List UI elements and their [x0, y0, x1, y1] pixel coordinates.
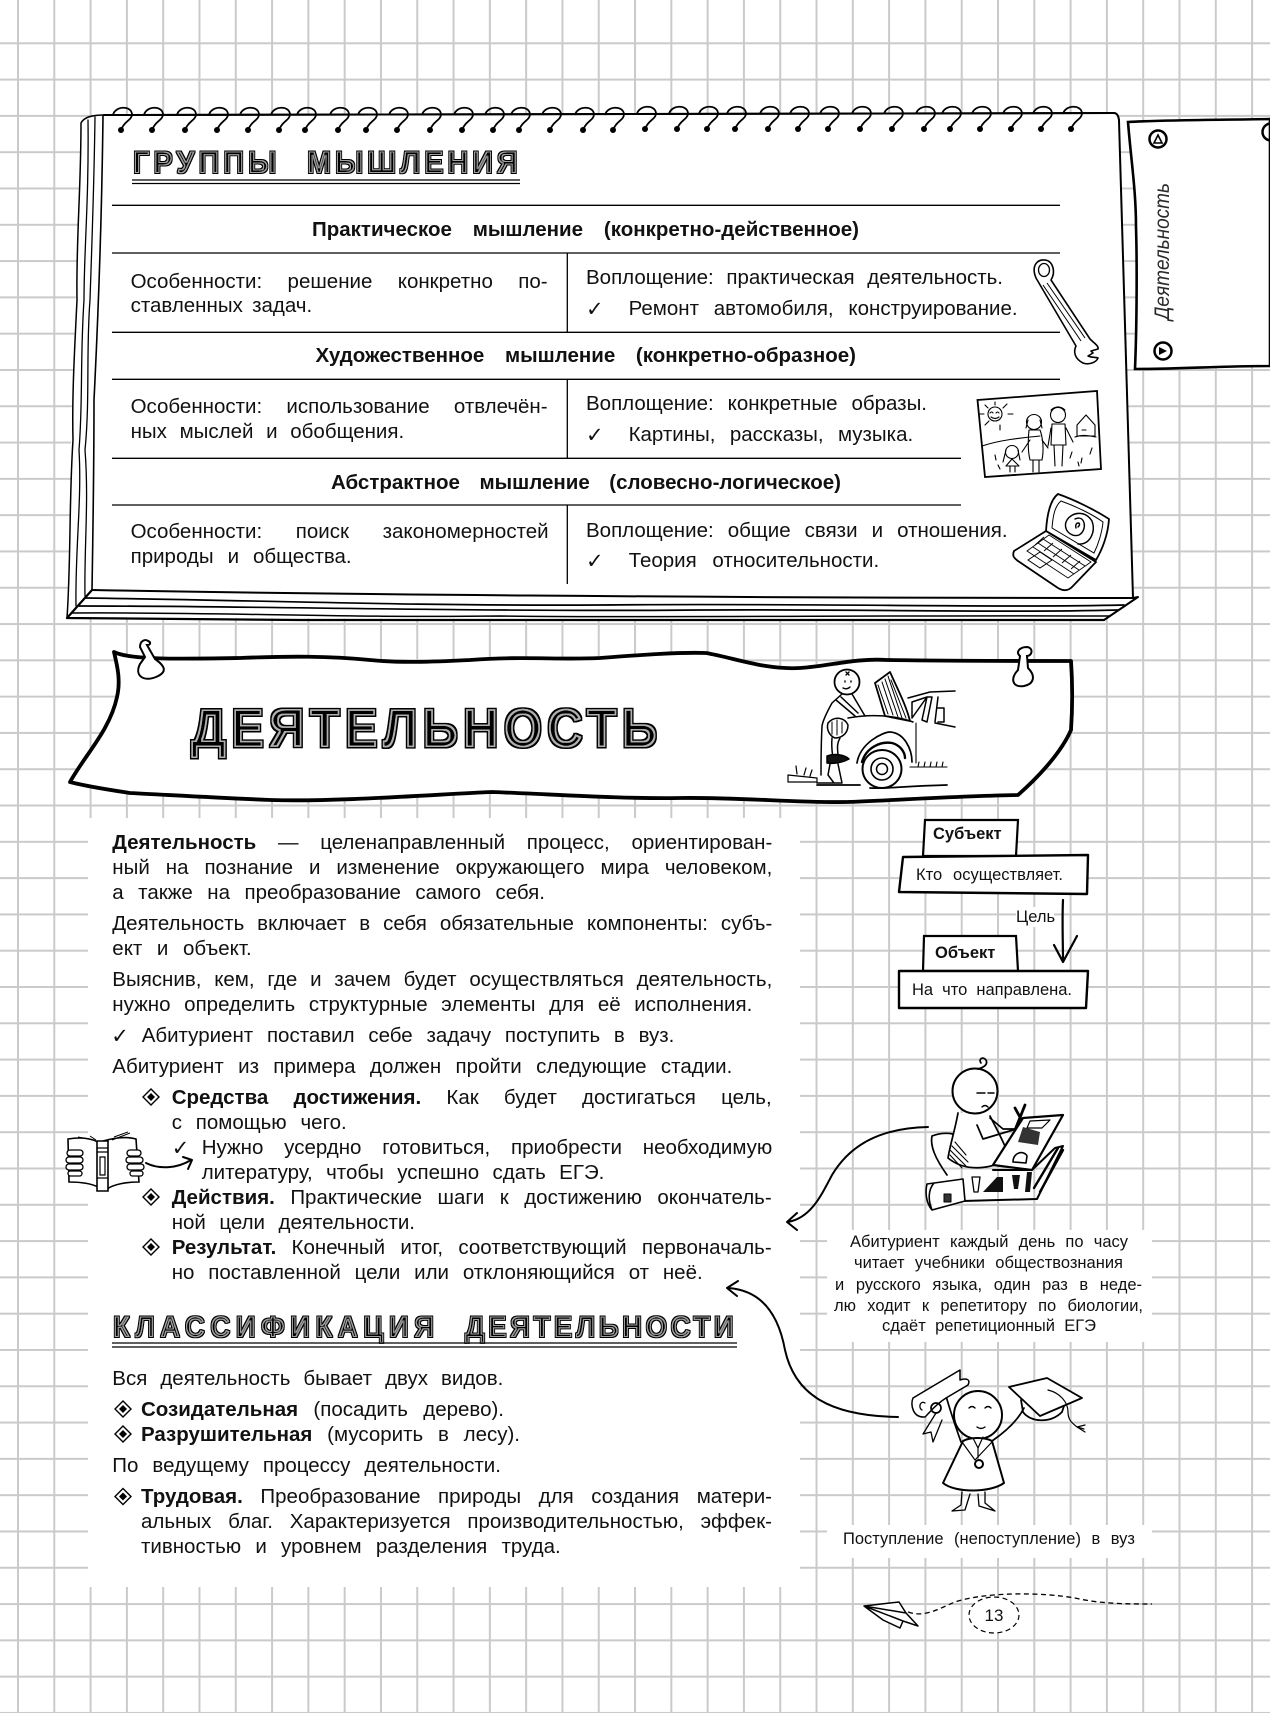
icon: child drawing of a family — [978, 391, 1101, 477]
sticky side tab: section name — [1126, 118, 1270, 370]
page number — [969, 1597, 1019, 1633]
icon: paper plane with dashed trail and page number — [863, 1593, 1152, 1634]
heading: practical thinking: Практическое мышление (конкретно-действенное) — [312, 218, 859, 241]
sticky side tab: section name: Деятельность — [1151, 183, 1174, 322]
graduate figure — [912, 1370, 1085, 1511]
definition paragraph — [112, 831, 772, 904]
row 3 embodiment: ✓ — [586, 549, 604, 573]
table rules — [112, 205, 1060, 584]
subject box — [899, 855, 1088, 894]
notebook page — [67, 113, 1138, 621]
object text: На что направлена. — [912, 981, 1072, 999]
caption: applicant daily work: и русского языка, один раз в неде- — [835, 1276, 1142, 1294]
curved arrow to text — [787, 1127, 928, 1230]
labour activity — [141, 1485, 772, 1558]
heading: thinking groups: ГРУППЫ — [133, 146, 277, 180]
curved arrow to text — [727, 1281, 898, 1417]
stage: actions — [172, 1186, 772, 1234]
components paragraph: Деятельность включает в себя обязательные компоненты: субъ- — [112, 912, 772, 935]
stages intro: Абитуриент из примера должен пройти следующие стадии. — [112, 1055, 732, 1078]
caption: admission — [827, 1525, 1152, 1558]
row 1 embodiment: Воплощение: практическая деятельность. — [586, 266, 1003, 289]
subject tab — [923, 820, 1018, 856]
heading: artistic thinking: Художественное мышление (конкретно-образное) — [316, 344, 856, 367]
illustration: graduate with diploma — [726, 1280, 1086, 1512]
row 3 features: Особенности: поиск закономерностей — [131, 520, 549, 543]
row 2 embodiment: ✓ — [586, 423, 604, 447]
heading: classification of activity: КЛАССИФИКАЦИЯ — [113, 1311, 434, 1344]
row 3 embodiment: Теория относительности. — [629, 549, 879, 572]
stage: result — [172, 1236, 772, 1284]
two kinds intro: Вся деятельность бывает двух видов. — [112, 1367, 503, 1390]
heading: thinking groups — [132, 146, 520, 184]
illustration: man repairing a car — [788, 670, 955, 788]
stage: means: литературу, чтобы успешно сдать ЕГЭ. — [202, 1161, 604, 1184]
caption: applicant daily work: Абитуриент каждый день по часу — [850, 1233, 1128, 1251]
student figure — [926, 1058, 1063, 1210]
components paragraph: ект и объект. — [112, 937, 252, 960]
heading: classification of activity — [112, 1311, 737, 1347]
structure paragraph: Выяснив, кем, где и зачем будет осуществляться деятельность, — [112, 968, 772, 991]
icon: wrench — [1034, 260, 1098, 364]
banner: activity title — [68, 639, 1074, 804]
row 2 features: Особенности: использование отвлечён- — [131, 395, 548, 418]
object label: Объект — [935, 944, 995, 962]
structure paragraph — [112, 968, 772, 1016]
example line: ✓ — [111, 1024, 129, 1048]
arrow: goal — [1054, 900, 1077, 962]
heading: abstract thinking: Абстрактное мышление (словесно-логическое) — [331, 471, 841, 494]
panel: notebook with thinking groups — [66, 106, 1139, 622]
leading process intro: По ведущему процессу деятельности. — [112, 1454, 501, 1477]
stage: actions: ной цели деятельности. — [172, 1211, 415, 1234]
kinds list: Созидательная (посадить дерево). — [141, 1398, 504, 1421]
kinds list: Разрушительная (мусорить в лесу). — [141, 1423, 520, 1446]
caption: applicant daily work — [827, 1230, 1152, 1342]
definition paragraph: ный на познание и изменение окружающего мира человеком, — [112, 856, 772, 879]
stage: result: но поставленной цели или отклоняющийся от неё. — [172, 1261, 703, 1284]
heading: thinking groups: МЫШЛЕНИЯ — [307, 146, 518, 180]
object box — [899, 971, 1088, 1008]
panel: main text column — [88, 818, 800, 1587]
row 1 embodiment: Ремонт автомобиля, конструирование. — [629, 297, 1018, 320]
stage: means: с помощью чего. — [172, 1111, 347, 1134]
stage: means: ✓ — [172, 1136, 189, 1160]
icon: laptop — [1013, 494, 1109, 590]
structure paragraph: нужно определить структурные элементы для её исполнения. — [112, 993, 752, 1016]
subject label: Субъект — [933, 825, 1002, 843]
stage: actions: Действия. Практические шаги к достижению окончатель- — [172, 1186, 772, 1209]
row 2 embodiment — [586, 392, 927, 447]
labour activity: Трудовая. Преобразование природы для создания матери- — [141, 1485, 772, 1508]
row 1 embodiment — [586, 266, 1018, 321]
labour activity: альных благ. Характеризуется производительностью, эффек- — [141, 1510, 772, 1533]
components paragraph — [112, 912, 772, 960]
definition paragraph: Деятельность — целенаправленный процесс, ориентирован- — [112, 831, 772, 854]
left pin — [138, 640, 164, 679]
kinds list — [141, 1398, 520, 1446]
row 2 features: ных мыслей и обобщения. — [131, 420, 404, 443]
object tab — [923, 936, 1018, 971]
caption: applicant daily work: лю ходит к репетитору по биологии, — [834, 1297, 1143, 1315]
heading: classification of activity: ДЕЯТЕЛЬНОСТИ — [465, 1311, 734, 1344]
row 3 embodiment: Воплощение: общие связи и отношения. — [586, 519, 1008, 542]
row 1 features: ставленных задач. — [131, 294, 312, 317]
row 1 embodiment: ✓ — [586, 297, 604, 321]
illustration: studying applicant — [786, 1057, 1064, 1231]
stage: means: Нужно усердно готовиться, приобрести необходимую — [202, 1136, 772, 1159]
stage: result: Результат. Конечный итог, соответствующий первоначаль- — [172, 1236, 772, 1259]
labour activity: тивностью и уровнем разделения труда. — [141, 1535, 561, 1558]
goal label: Цель — [1016, 908, 1055, 926]
stage: means — [172, 1086, 772, 1184]
example line: Абитуриент поставил себе задачу поступить в вуз. — [142, 1024, 674, 1047]
caption: applicant daily work: сдаёт репетиционный ЕГЭ — [882, 1317, 1096, 1335]
page number: 13 — [985, 1606, 1003, 1625]
row 2 embodiment: Картины, рассказы, музыка. — [629, 423, 913, 446]
bullet markers — [115, 1089, 159, 1504]
right pin — [1013, 647, 1033, 686]
subject text: Кто осуществляет. — [916, 866, 1063, 884]
icon: open book with hands — [65, 1132, 193, 1192]
spiral rings — [104, 107, 1114, 133]
banner title text: ДЕЯТЕЛЬНОСТЬ — [191, 699, 657, 760]
row 2 features — [131, 395, 548, 443]
row 3 features: природы и общества. — [131, 545, 352, 568]
arrow to example — [146, 1157, 192, 1169]
row 1 features: Особенности: решение конкретно по- — [131, 270, 548, 293]
row 2 embodiment: Воплощение: конкретные образы. — [586, 392, 927, 415]
caption: applicant daily work: читает учебники обществознания — [854, 1254, 1123, 1272]
row 3 embodiment — [586, 519, 1008, 573]
definition paragraph: а также на преобразование самого себя. — [112, 881, 545, 904]
diagram: subject and object — [898, 818, 1090, 1010]
row 1 features — [131, 270, 548, 317]
caption: admission: Поступление (непоступление) в вуз — [843, 1530, 1135, 1548]
stage: means: Средства достижения. Как будет достигаться цель, — [172, 1086, 772, 1109]
row 3 features — [131, 520, 549, 568]
